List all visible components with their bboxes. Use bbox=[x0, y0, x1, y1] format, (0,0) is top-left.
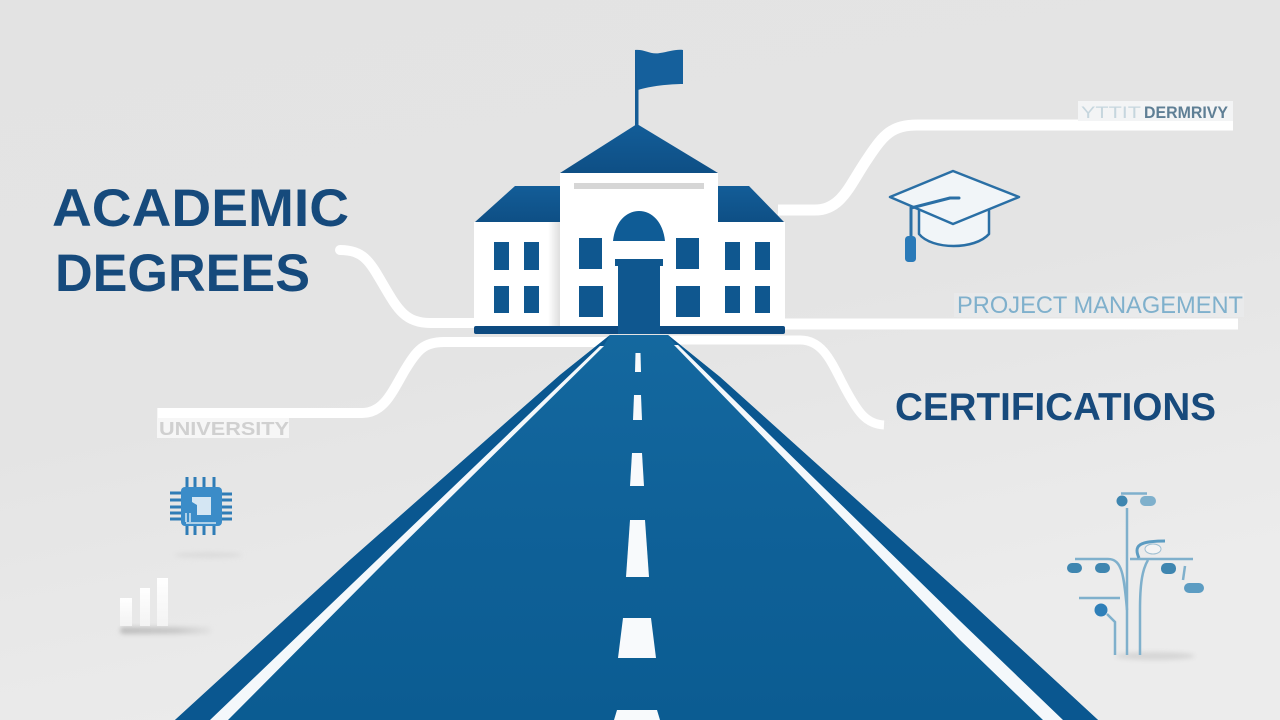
label: top right bbox=[1078, 101, 1233, 122]
title: academic degrees: DEGREES bbox=[55, 244, 310, 303]
connector: top right label to building bbox=[778, 125, 1233, 210]
icon: skill tree bbox=[1067, 494, 1204, 660]
door bbox=[615, 259, 663, 334]
connector: academic degrees to building bbox=[340, 250, 478, 323]
shadow: microchip bbox=[174, 552, 242, 558]
title: academic degrees: ACADEMIC bbox=[52, 179, 349, 238]
label: certifications: CERTIFICATIONS bbox=[895, 386, 1216, 429]
right road stripe bbox=[674, 345, 1063, 720]
icon: bar chart bbox=[120, 578, 212, 634]
road outer band left bbox=[175, 335, 610, 720]
left road stripe bbox=[210, 346, 604, 720]
road bbox=[175, 335, 1098, 720]
left wing bbox=[474, 186, 562, 328]
connector: university to road bbox=[158, 342, 612, 413]
base bbox=[474, 326, 785, 334]
road surface bbox=[175, 335, 1098, 720]
road centre dashes bbox=[614, 353, 660, 720]
road outer band right bbox=[668, 335, 1098, 720]
flag bbox=[635, 50, 683, 126]
right wing bbox=[716, 186, 785, 328]
label: project management: PROJECT MANAGEMENT bbox=[957, 292, 1243, 319]
label: top right: DERMRIVY bbox=[1144, 103, 1229, 122]
connector: certifications to road bbox=[664, 340, 884, 425]
label: university: UNIVERSITY bbox=[159, 419, 289, 439]
icon: microchip bbox=[170, 477, 232, 535]
label: top right: YTTIT bbox=[1081, 103, 1141, 122]
main hall bbox=[560, 124, 718, 327]
icon: graduation cap bbox=[890, 171, 1019, 262]
title: academic degrees bbox=[52, 179, 349, 303]
label: university bbox=[157, 408, 290, 439]
connector: project management to building bbox=[782, 318, 1238, 330]
icon: school building bbox=[474, 50, 785, 334]
